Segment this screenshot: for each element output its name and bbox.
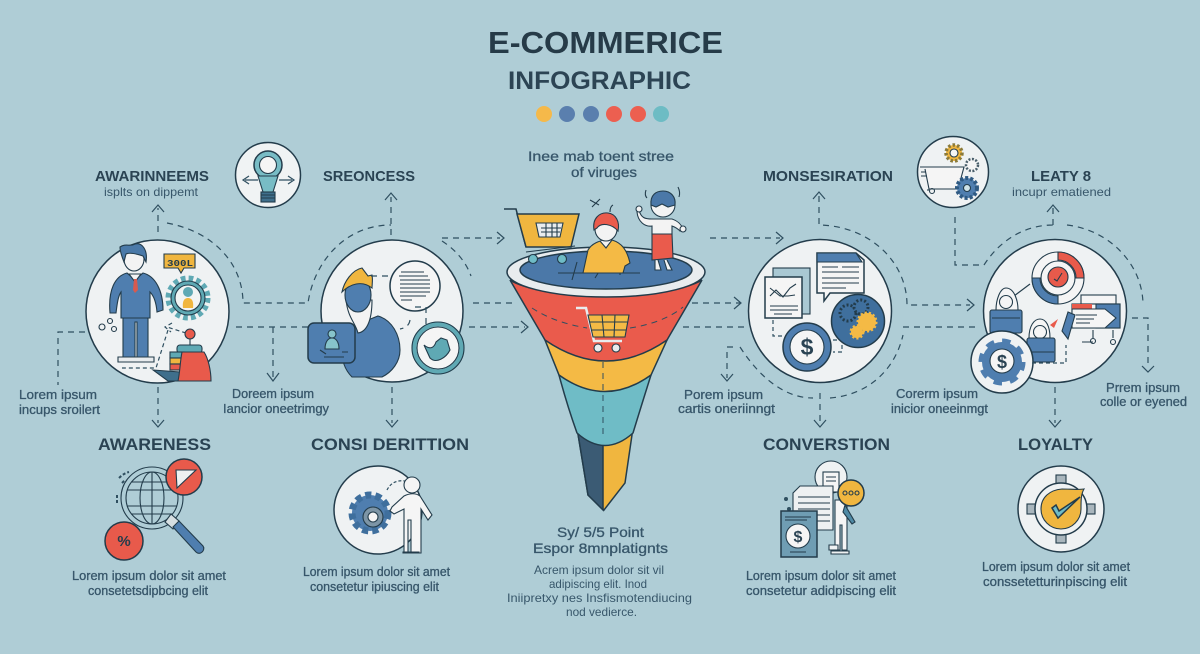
label: corerm: inicior oneeinmgt: [891, 402, 989, 416]
label: doreem: [223, 387, 330, 416]
cart icon on funnel: [576, 308, 629, 352]
label: awareness top: isplts on dippemt: [104, 185, 199, 199]
yellow segment: [545, 340, 667, 392]
child one: [583, 199, 630, 273]
dashed connector network: [58, 192, 1154, 427]
section: awareness: [72, 435, 227, 598]
gear with person: [169, 279, 207, 317]
panel: customer circle: [308, 240, 464, 382]
gears circle: [832, 294, 884, 348]
panel: businessman circle: [86, 240, 229, 383]
funnel: [507, 247, 705, 510]
icon: globe and magnifier: [105, 459, 204, 560]
label: porem: cartis oneriinngt: [678, 402, 776, 416]
shopping cart: [504, 209, 579, 264]
bottom segment: [577, 428, 633, 510]
label: porem: Porem ipsum: [684, 388, 763, 402]
dollar coin: $: [801, 334, 814, 360]
section: loyalty: LOYALTY: [1018, 435, 1094, 454]
red machine: [122, 323, 211, 381]
label: awareness top: [95, 168, 209, 199]
section: consideration: CONSI DERITTION: [311, 435, 469, 454]
colour dots: [536, 106, 669, 122]
label: loyalty top: [1012, 168, 1111, 199]
label: prrem: colle or eyened: [1100, 395, 1187, 409]
label: corerm: Corerm ipsum: [896, 387, 978, 401]
speech badge: 300L: [167, 259, 193, 269]
chart document: [765, 268, 810, 318]
label: lorem left: [19, 388, 101, 417]
section: conversion: CONVERSTION: [763, 435, 890, 454]
funnel footer text: Sy/ 5/5 Point: [557, 524, 644, 540]
target dial: [1032, 252, 1084, 304]
icon: documents and person: $: [794, 529, 803, 546]
consideration text: consetetur ipiuscing elit: [310, 580, 440, 594]
icon: gears and cart: [918, 136, 988, 208]
label: awareness top: AWARINNEEMS: [95, 168, 209, 185]
label: prrem: [1100, 381, 1187, 409]
conversion text: consetetur adidpiscing elit: [746, 584, 897, 598]
funnel heading: of viruges: [571, 164, 637, 180]
section: loyalty: [982, 435, 1131, 589]
title: INFOGRAPHIC: [508, 67, 691, 95]
panel: conversion top circle: [748, 240, 892, 382]
funnel footer text: Acrem ipsum dolor sit vil: [534, 563, 664, 577]
label: doreem: Iancior oneetrimgy: [223, 402, 330, 416]
awareness text: Lorem ipsum dolor sit amet: [72, 569, 227, 583]
funnel footer text: adipiscing elit. Inod: [549, 577, 647, 591]
label: process top: SREONCESS: [323, 168, 415, 185]
funnel heading: Inee mab toent stree: [528, 148, 674, 164]
businessman figure: [99, 244, 163, 362]
label: consideration top: MONSESIRATION: [763, 168, 893, 185]
people: [990, 284, 1058, 362]
icon: gear and person: [334, 466, 432, 554]
dollar gear: [971, 331, 1033, 393]
consideration text: [303, 565, 450, 594]
conversion text: Lorem ipsum dolor sit amet: [746, 569, 897, 583]
consideration text: Lorem ipsum dolor sit amet: [303, 565, 450, 579]
tablet: [308, 323, 355, 363]
customer figure: [342, 268, 400, 377]
funnel footer text: Iniipretxy nes Insfismotendiucing: [507, 591, 692, 605]
awareness text: [72, 569, 227, 598]
funnel guides: [532, 307, 683, 437]
label: corerm: [891, 387, 989, 416]
conversion text: [746, 569, 897, 598]
chat document: [817, 253, 864, 301]
section: conversion: [746, 435, 897, 598]
label: doreem: Doreem ipsum: [232, 387, 314, 401]
funnel footer text: Espor 8mnplatignts: [533, 540, 668, 556]
label: lorem left: Lorem ipsum: [19, 388, 97, 402]
title: E-COMMERICE: [488, 25, 723, 60]
icon: light bulb: [236, 142, 300, 208]
awareness text: consetetsdipbcing elit: [88, 584, 209, 598]
dollar coin: [773, 320, 842, 371]
loyalty text: Lorem ipsum dolor sit amet: [982, 560, 1131, 574]
child two: [636, 187, 686, 270]
funnel footer text: nod vedierce.: [566, 605, 637, 619]
loyalty text: [982, 560, 1131, 589]
dollar gear: $: [997, 352, 1007, 372]
label: prrem: Prrem ipsum: [1106, 381, 1180, 395]
section: consideration: [303, 435, 469, 594]
info card cart: [1062, 295, 1120, 344]
icon: globe and magnifier: %: [117, 533, 131, 550]
funnel opening: [520, 251, 692, 289]
label: loyalty top: LEATY 8: [1031, 168, 1091, 185]
icon: documents and person: [781, 461, 864, 557]
document circle: [371, 261, 440, 329]
red segment: [510, 280, 702, 361]
label: lorem left: incups sroilert: [19, 403, 101, 417]
funnel footer text: [507, 524, 692, 619]
icon: check badge: [1018, 466, 1104, 552]
rim: [507, 247, 705, 297]
loyalty text: conssetetturinpiscing elit: [983, 575, 1128, 589]
title: [488, 25, 723, 95]
panel: loyalty circle: [971, 240, 1126, 393]
label: porem: [678, 388, 776, 416]
teal badge: [412, 322, 464, 374]
speech badge: [164, 254, 195, 273]
teal segment: [559, 375, 651, 446]
funnel heading: [528, 148, 674, 180]
section: awareness: AWARENESS: [98, 435, 211, 454]
label: loyalty top: incupr ematiened: [1012, 185, 1111, 199]
